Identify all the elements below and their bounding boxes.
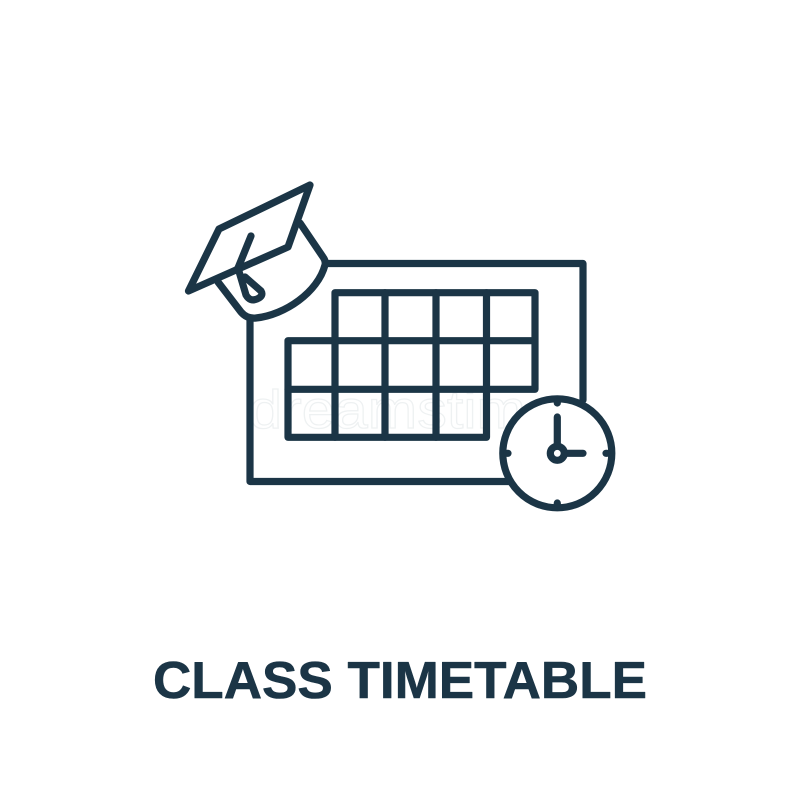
timetable frame: [250, 264, 583, 482]
icon: graduation cap: [188, 185, 325, 318]
icon: class timetable: [188, 185, 612, 508]
title: CLASS TIMETABLE: [153, 652, 647, 710]
icon: clock: [503, 399, 612, 508]
watermark: dreamstime: [249, 380, 559, 440]
timetable grid: [288, 293, 535, 437]
